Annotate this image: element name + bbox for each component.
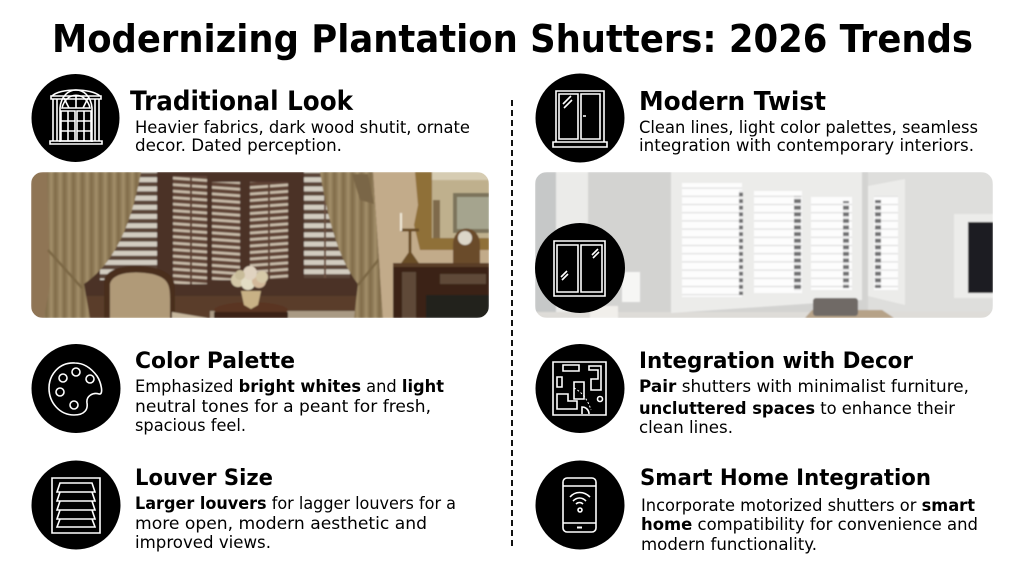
center dashed divider [511, 100, 513, 550]
heading: Louver Size [135, 466, 273, 491]
panel: modern twist [535, 74, 993, 318]
heading: Smart Home Integration [640, 466, 931, 491]
title: Modernizing Plantation Shutters: 2026 Trends [52, 17, 973, 61]
panel: traditional look [31, 74, 489, 318]
wall right [372, 172, 386, 271]
icon: smartphone with wifi [536, 460, 624, 550]
chair [104, 266, 175, 318]
tv niche [954, 214, 993, 298]
panel: smart home integration [536, 460, 978, 554]
description: Clean lines, light color palettes, seamless [639, 118, 978, 137]
description [639, 377, 969, 437]
heading: Color Palette [135, 349, 295, 374]
icon: window badge over photo [535, 223, 625, 313]
icon: floor plan [536, 344, 624, 433]
photo: modern white room with white shutters [535, 172, 993, 318]
candelabra [401, 230, 419, 263]
description: clean lines. [639, 418, 733, 437]
lamp [622, 272, 640, 302]
description [641, 496, 978, 554]
side shutter [868, 179, 905, 305]
description [135, 377, 444, 435]
description: Emphasized bright whites and light [135, 377, 444, 396]
heading: Traditional Look [130, 86, 354, 117]
panel: integration with decor [536, 344, 969, 437]
vase and flowers [241, 291, 261, 309]
icon: modern window [536, 74, 624, 162]
photo: traditional room with dark wood shutters [31, 172, 489, 318]
description [639, 118, 978, 155]
panel: color palette [32, 344, 444, 435]
description: improved views. [135, 533, 271, 552]
shutter panels [100, 172, 157, 280]
description: uncluttered spaces to enhance their [639, 399, 955, 418]
description [135, 118, 470, 155]
heading: Modern Twist [639, 87, 826, 117]
description: Heavier fabrics, dark wood shutit, ornate [135, 118, 470, 137]
icon: ornate arched window [32, 74, 120, 162]
description: integration with contemporary interiors. [639, 136, 974, 155]
description: Incorporate motorized shutters or smart [641, 496, 975, 515]
description: more open, modern aesthetic and [135, 514, 427, 533]
icon: paint palette [32, 344, 120, 433]
description: spacious feel. [135, 416, 246, 435]
heading: Integration with Decor [639, 349, 913, 374]
mantel [393, 263, 489, 318]
right curtain [320, 172, 383, 318]
sofa [805, 310, 894, 318]
description: Pair shutters with minimalist furniture, [639, 377, 969, 396]
clock [453, 228, 480, 263]
icon: louvers [32, 460, 120, 550]
mirror [414, 172, 489, 250]
panel: louver size [32, 460, 456, 552]
left curtain [44, 172, 141, 318]
description: home compatibility for convenience and [641, 515, 978, 534]
shutter frame [671, 172, 862, 313]
description: modern functionality. [641, 535, 817, 554]
description [135, 494, 456, 552]
description: neutral tones for a peant for fresh, [135, 397, 431, 416]
description: decor. Dated perception. [135, 136, 342, 155]
table [214, 310, 288, 314]
description: Larger louvers for lagger louvers for a [135, 494, 456, 513]
